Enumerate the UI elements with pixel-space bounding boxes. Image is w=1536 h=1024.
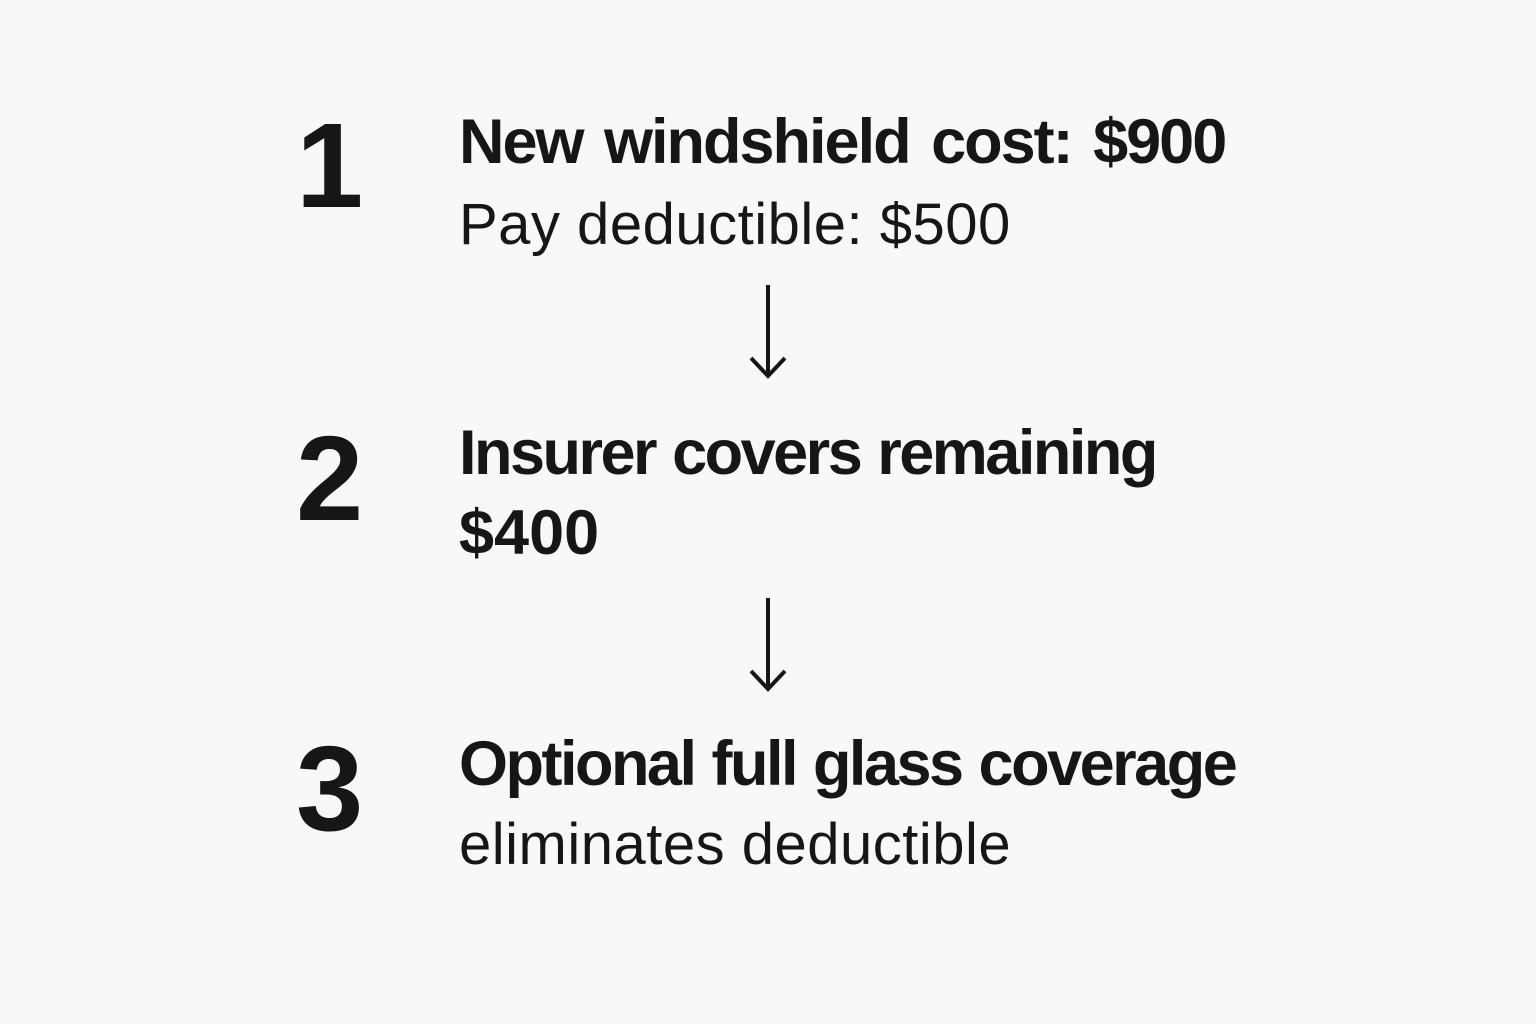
number 1: 1: [296, 97, 363, 233]
step 2: [296, 410, 1156, 568]
step 2 amount: $400: [459, 498, 599, 568]
step 1 heading: New windshield cost: $900: [459, 107, 1225, 177]
number 2: 2: [296, 410, 363, 546]
arrow 2: [750, 598, 786, 692]
number 3: 3: [296, 720, 363, 856]
step 3 heading: Optional full glass coverage: [459, 729, 1235, 799]
arrow 1: [750, 285, 786, 379]
step 1: [296, 97, 1225, 257]
step 3 detail: eliminates deductible: [459, 812, 1011, 877]
step 1 detail: Pay deductible: $500: [459, 192, 1011, 257]
step 3: [296, 720, 1236, 877]
step 2 heading: Insurer covers remaining: [459, 418, 1156, 488]
